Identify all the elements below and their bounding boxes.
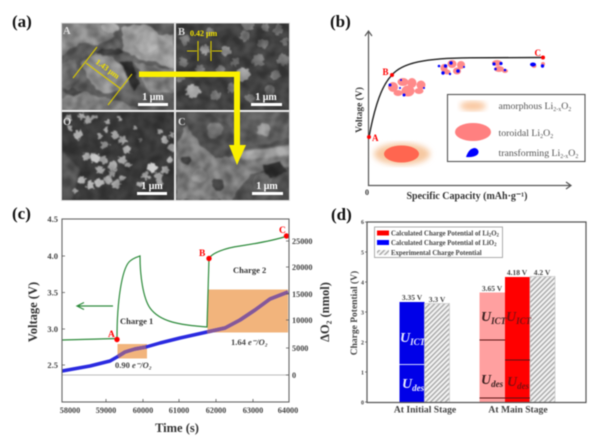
bar value labels: 4.18 V <box>507 268 528 277</box>
legend: LiO2: 2 <box>494 243 497 248</box>
left axis labels: 2.5 <box>47 360 58 370</box>
SEM image A <box>60 20 175 112</box>
legend <box>374 227 502 258</box>
left axis labels: 4.0 <box>47 251 58 261</box>
panel: SEM micrographs <box>60 19 290 201</box>
right axis labels: 5000 <box>292 344 308 353</box>
right axis labels: 0 <box>292 371 296 380</box>
bar value labels <box>402 268 551 304</box>
plot frame <box>367 222 586 402</box>
x axis labels <box>60 406 298 415</box>
bar term labels: des <box>412 383 425 393</box>
point labels: B <box>382 67 389 77</box>
legend: transforming: 2-x <box>560 154 568 160</box>
charge labels: Charge 2 <box>233 265 266 275</box>
legend: toroidal: 2 <box>540 134 543 140</box>
panel: charge potential bars <box>349 220 586 416</box>
panel label (c): (c) <box>12 204 31 223</box>
charge labels: Charge 1 <box>120 316 153 326</box>
O2 curve <box>62 292 288 371</box>
ticks <box>62 241 289 402</box>
left axis labels <box>47 214 58 370</box>
panel label (b): (b) <box>330 12 351 31</box>
y axis labels: 2 <box>361 340 364 346</box>
SEM image B <box>176 19 289 110</box>
y axis title: Charge Potential (V) <box>349 271 360 355</box>
panel: voltage schematic <box>354 31 585 202</box>
arrow: yellow progression <box>139 72 246 165</box>
legend: transforming: transforming Li <box>498 148 560 159</box>
scale labels: 1 μm <box>142 92 164 103</box>
legend: amorphous <box>460 101 571 113</box>
x axis title: Time (s) <box>155 421 199 435</box>
point labels: A <box>372 133 379 143</box>
bar term labels: des <box>491 379 504 389</box>
legend: Li2O2: 2 <box>489 234 492 238</box>
y axis labels: 4 <box>361 280 364 286</box>
bar term labels: U <box>506 310 516 325</box>
voltage point labels <box>108 226 286 340</box>
left axis labels: 4.5 <box>47 214 58 224</box>
main red bar <box>505 277 530 402</box>
legend: toroidal: O <box>543 128 550 139</box>
scale labels: 1 μm <box>141 181 163 192</box>
voltage point labels: C <box>279 226 286 236</box>
x axis labels: 60000 <box>133 406 153 415</box>
initial blue bar <box>400 302 424 402</box>
panel label (a): (a) <box>12 12 32 31</box>
image letters: B <box>178 27 185 38</box>
measurement labels: 1.43 μm <box>94 57 121 81</box>
left axis labels: 3.5 <box>47 288 58 298</box>
bar term labels: U <box>400 331 410 346</box>
right axis labels <box>292 237 312 380</box>
x axis labels <box>394 404 548 416</box>
voltage point labels: B <box>199 249 206 259</box>
y axis title left: Voltage (V) <box>26 282 40 342</box>
right axis labels: 15000 <box>292 290 312 299</box>
voltage curve <box>62 236 288 340</box>
zero line <box>62 374 288 376</box>
SEM image O <box>62 112 176 200</box>
bar value labels: 3.3 V <box>429 295 446 304</box>
legend: amorphous: 2-x <box>553 107 561 113</box>
point labels: C <box>534 48 541 58</box>
curve points <box>367 56 545 139</box>
legend: transforming: O <box>568 148 575 159</box>
x axis labels: 59000 <box>96 406 116 415</box>
x axis zero: 0 <box>365 188 369 197</box>
bar dividers <box>400 364 424 366</box>
y axis labels: 6 <box>361 220 364 226</box>
voltage curve <box>369 58 543 137</box>
image letters <box>63 26 186 128</box>
bar term labels: ICT <box>515 316 532 326</box>
electron ratio labels: 0.90 e⁻/O₂ <box>115 360 152 370</box>
legend: experimental: Experimental Charge Potential <box>391 250 482 257</box>
legend: Li2O2: O <box>491 230 496 238</box>
measurement annotations <box>73 41 222 105</box>
SEM image C <box>176 110 290 200</box>
y axis labels: 3 <box>361 310 364 316</box>
particle cluster mid 2 <box>492 60 508 73</box>
legend: transforming: 2 <box>575 154 578 160</box>
panel label (d): (d) <box>331 205 352 224</box>
main hatched bar <box>530 276 555 402</box>
electron ratio labels: 1.64 e⁻/O₂ <box>231 337 268 347</box>
legend: Li2O2: Calculated Charge Potential of Li <box>391 230 489 238</box>
legend <box>448 94 585 162</box>
electron ratio labels <box>115 337 268 370</box>
x axis labels: 62000 <box>206 406 226 415</box>
charge labels <box>120 265 266 326</box>
y axis labels: 1 <box>361 370 364 376</box>
left axis labels: 3.0 <box>47 324 58 334</box>
bar value labels: 3.35 V <box>402 293 423 302</box>
voltage points <box>114 233 289 342</box>
bar term labels: ICT <box>409 337 426 347</box>
right axis labels: 10000 <box>292 316 312 325</box>
legend: Li2O2: 2 <box>496 234 500 238</box>
image letters: A <box>63 26 71 37</box>
bar term labels: des <box>517 381 530 391</box>
legend: toroidal: toroidal Li <box>498 128 540 139</box>
bar term labels: U <box>481 310 491 325</box>
right axis labels: 25000 <box>292 237 312 246</box>
x axis labels: 58000 <box>60 406 80 415</box>
grid gaps between images <box>62 23 290 200</box>
axes <box>365 31 571 189</box>
bar term labels: U <box>402 377 412 392</box>
bar term labels: U <box>507 375 517 390</box>
bar term labels: U <box>481 373 491 388</box>
main pink bar <box>480 292 505 402</box>
ticks <box>365 222 367 402</box>
particle cluster B <box>388 78 426 96</box>
scale labels <box>141 92 278 192</box>
orange O2 regions <box>118 290 288 358</box>
legend: amorphous: amorphous Li <box>498 101 553 112</box>
x axis labels: 64000 <box>278 406 298 415</box>
bar value labels: 3.65 V <box>482 284 503 293</box>
y axis title right: ΔO₂ (nmol) <box>318 282 332 342</box>
image letters: O <box>63 117 71 128</box>
initial particle A <box>374 143 430 165</box>
measurement labels <box>94 29 218 81</box>
y axis labels: 0 <box>361 400 364 406</box>
legend: toroidal: 2 <box>550 134 553 140</box>
x axis title: Specific Capacity (mAh·g⁻¹) <box>406 191 528 202</box>
panel: voltage and O2 chart <box>26 214 332 435</box>
particle cluster mid 1 <box>438 60 465 75</box>
x axis labels: At Initial Stage <box>394 404 457 416</box>
legend: Li2O2 <box>377 230 500 238</box>
voltage point labels: A <box>108 330 115 340</box>
measurement labels: 0.42 μm <box>190 29 218 38</box>
y axis labels <box>361 220 364 406</box>
image letters: C <box>178 117 186 128</box>
O2 curve overlap <box>118 292 288 356</box>
y axis title: Voltage (V) <box>354 87 365 133</box>
particle cluster C <box>530 62 545 68</box>
arrow: voltage axis <box>77 302 113 310</box>
scale labels: 1 μm <box>255 92 277 103</box>
x axis labels: 61000 <box>169 406 189 415</box>
initial hatched bar <box>424 304 450 402</box>
y axis labels: 5 <box>361 250 364 256</box>
bar term labels: ICT <box>490 316 507 326</box>
legend: toroidal <box>455 123 553 141</box>
scale bars <box>137 103 283 195</box>
x axis labels: 63000 <box>243 406 263 415</box>
x axis labels: At Main Stage <box>488 404 548 416</box>
bar term labels <box>400 310 532 393</box>
scale labels: 1 μm <box>256 181 278 192</box>
right axis labels: 20000 <box>292 263 312 272</box>
point labels <box>372 48 541 143</box>
legend: LiO2: Calculated Charge Potential of LiO <box>391 240 494 247</box>
bar value labels: 4.2 V <box>534 268 551 277</box>
legend: amorphous: O <box>561 101 568 112</box>
legend: amorphous: 2 <box>568 107 571 113</box>
legend: transforming <box>466 148 578 160</box>
plot frame <box>62 219 289 402</box>
